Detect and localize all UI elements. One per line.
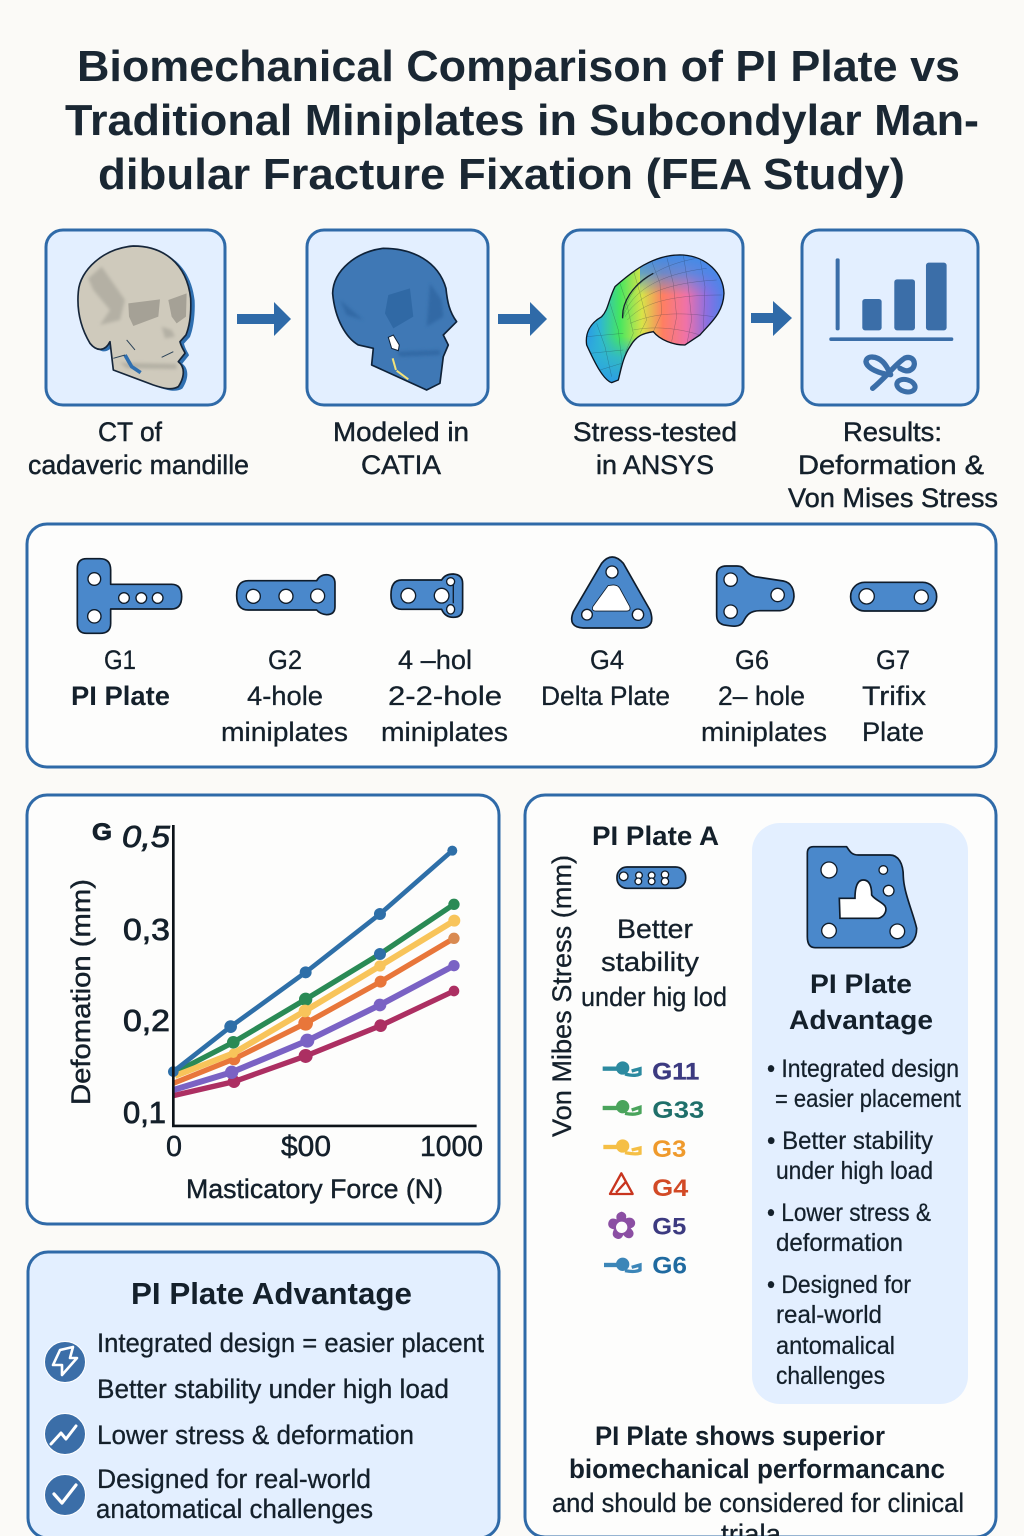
list items: Better stability under high load xyxy=(97,1374,449,1404)
icon: modeled blue skull xyxy=(333,248,457,390)
bullet: designed for real world: antomalical xyxy=(776,1332,895,1360)
icon: small plate xyxy=(617,867,686,888)
label: G3: miniplates xyxy=(381,717,508,747)
series: green xyxy=(173,899,460,1073)
heading: Advantage xyxy=(789,1005,933,1035)
icon: G1 PI plate xyxy=(77,559,182,633)
y axis labels xyxy=(92,819,171,1130)
icon: FEA stress mesh xyxy=(583,253,727,383)
x axis labels: $00 xyxy=(281,1131,331,1163)
label: G6: G6 xyxy=(735,645,769,675)
panel: workflow step 3 ANSYS xyxy=(563,230,743,405)
caption: step 1: CT of xyxy=(98,417,162,447)
bullet: better stability xyxy=(767,1127,933,1185)
bullet: integrated design xyxy=(767,1055,961,1113)
label: G2: G2 xyxy=(268,645,302,675)
conclusion: biomechanical performancanc xyxy=(569,1454,945,1484)
series: blue xyxy=(168,846,457,1077)
text: better stability xyxy=(581,914,727,1012)
y axis labels: G xyxy=(92,819,112,846)
legend row G33: G33 xyxy=(652,1097,704,1124)
panel: plate types xyxy=(27,524,996,767)
icon: check xyxy=(44,1474,86,1516)
arrow: step 2 to 3 xyxy=(498,302,547,336)
label: G7: G7 xyxy=(876,645,910,675)
label: G7: Plate xyxy=(862,717,924,747)
panel: inner PI plate advantage xyxy=(752,823,968,1404)
bullet: better stability: • Better stability xyxy=(767,1127,933,1155)
title: Biomechanical Comparison of PI Plate vs xyxy=(77,42,960,91)
caption: step 1: cadaveric mandille xyxy=(28,450,249,480)
panel: workflow step 4 results xyxy=(802,230,978,405)
bullet: lower stress: • Lower stress & xyxy=(767,1199,931,1227)
legend row G11 xyxy=(603,1058,699,1085)
label: G2 xyxy=(221,645,348,747)
label: G7: Trifix xyxy=(862,681,927,711)
panel: deformation chart xyxy=(27,795,499,1224)
line chart xyxy=(168,825,477,1126)
icon: G4 delta plate xyxy=(572,557,652,628)
caption: step 4: Results: xyxy=(843,417,942,447)
label: G2: miniplates xyxy=(221,717,348,747)
conclusion xyxy=(552,1421,964,1536)
legend row G11: G11 xyxy=(652,1058,699,1085)
caption: step 4: Deformation & xyxy=(798,450,984,480)
list items: anatomatical challenges xyxy=(96,1494,373,1524)
legend row G4: G4 xyxy=(652,1175,689,1202)
caption: step 1 xyxy=(28,417,249,480)
label: G4 xyxy=(541,645,670,711)
series: orange xyxy=(173,933,460,1083)
y axis labels: 0,2 xyxy=(123,1003,170,1038)
series: yellow xyxy=(175,915,460,1076)
y axis title: Defomation (mm) xyxy=(66,879,96,1105)
legend row G5 xyxy=(608,1212,686,1240)
caption: step 4: Von Mises Stress xyxy=(788,483,998,513)
list items: Lower stress & deformation xyxy=(97,1420,414,1450)
icon: G2 4-hole miniplate xyxy=(237,575,335,615)
list items xyxy=(96,1328,484,1524)
bullet: better stability: under high load xyxy=(776,1157,933,1185)
label: G3: 2-2-hole xyxy=(388,681,502,711)
legend row G33 xyxy=(603,1097,704,1124)
heading: PI Plate Advantage xyxy=(131,1276,412,1311)
label: G4: Delta Plate xyxy=(541,681,670,711)
title: Traditional Miniplates in Subcondylar Man- xyxy=(65,96,979,145)
icon: CT skull xyxy=(78,246,195,391)
x axis labels: 1000 xyxy=(420,1131,483,1163)
caption: step 2: Modeled in xyxy=(333,417,469,447)
bullet: designed for real world xyxy=(767,1271,911,1390)
label: G1: G1 xyxy=(104,645,136,675)
label: G6: miniplates xyxy=(701,717,827,747)
legend xyxy=(603,1058,704,1279)
label: G6: 2– hole xyxy=(718,681,805,711)
bullet: integrated design: • Integrated design xyxy=(767,1055,959,1083)
caption: step 3: Stress-tested xyxy=(573,417,737,447)
legend row G5: G5 xyxy=(652,1213,686,1240)
x axis labels xyxy=(166,1131,483,1163)
series: crimson xyxy=(173,986,459,1096)
arrow: step 3 to 4 xyxy=(751,301,792,336)
legend row G3: G3 xyxy=(652,1136,686,1163)
icon: G6 2-hole miniplate xyxy=(717,566,794,626)
caption: step 2 xyxy=(333,417,469,480)
text: better stability: Better xyxy=(617,914,693,944)
conclusion: PI Plate shows superior xyxy=(595,1421,885,1451)
label: G1 xyxy=(71,645,170,711)
legend row G6: G6 xyxy=(652,1252,687,1279)
text: better stability: under hig lod xyxy=(581,982,727,1012)
bullet: designed for real world: challenges xyxy=(776,1362,885,1390)
heading: PI Plate xyxy=(810,969,912,999)
label: G3 xyxy=(381,645,508,747)
label: G6 xyxy=(701,645,827,747)
bullet: designed for real world: • Designed for xyxy=(767,1271,911,1299)
label: G3: 4 –hol xyxy=(398,645,472,675)
caption: step 3: in ANSYS xyxy=(596,450,714,480)
bullet: lower stress xyxy=(767,1199,931,1257)
panel: workflow step 1 CT xyxy=(46,230,225,405)
bullet: integrated design: = easier placement xyxy=(775,1085,961,1113)
heading xyxy=(789,969,933,1035)
legend row G4 xyxy=(610,1173,689,1202)
y axis title: Von Mibes Stress (mm) xyxy=(547,855,577,1137)
bullet: lower stress: deformation xyxy=(776,1229,903,1257)
title: dibular Fracture Fixation (FEA Study) xyxy=(98,150,905,199)
x axis labels: 0 xyxy=(166,1131,182,1163)
legend row G6 xyxy=(604,1252,687,1279)
icon: G3 2-2-hole miniplate xyxy=(391,574,463,617)
arrow: step 1 to 2 xyxy=(237,302,291,336)
icon: G7 trifix plate xyxy=(851,582,937,611)
title xyxy=(65,42,979,199)
y axis labels: 0,3 xyxy=(123,912,170,947)
legend row G3 xyxy=(603,1136,686,1163)
x axis title: Masticatory Force (N) xyxy=(186,1174,443,1204)
icon: trend line xyxy=(44,1414,86,1454)
caption: step 3 xyxy=(573,417,737,480)
text: better stability: stability xyxy=(601,947,700,977)
conclusion: and should be considered for clinical xyxy=(552,1488,964,1518)
axes xyxy=(173,825,477,1126)
series: purple xyxy=(173,960,460,1090)
bullet: designed for real world: real-world xyxy=(776,1301,882,1329)
list items: Designed for real-world xyxy=(97,1464,371,1494)
label: G4: G4 xyxy=(590,645,624,675)
y axis labels: 0,5 xyxy=(122,819,171,854)
list items: Integrated design = easier placent xyxy=(97,1328,484,1358)
label: G7 xyxy=(862,645,927,747)
panel: PI plate advantage list xyxy=(28,1252,499,1536)
label: G2: 4-hole xyxy=(247,681,323,711)
icon: results bar chart and percent xyxy=(829,258,953,394)
caption: step 4 xyxy=(788,417,998,513)
y axis labels: 0,1 xyxy=(123,1095,166,1130)
heading: PI Plate A: PI Plate A xyxy=(592,821,719,851)
icon: PI plate xyxy=(807,847,917,948)
label: G1: PI Plate xyxy=(71,681,170,711)
panel: von Mises stress and conclusion xyxy=(525,795,996,1536)
caption: step 2: CATIA xyxy=(361,450,441,480)
panel: workflow step 2 CATIA xyxy=(307,230,488,405)
icon: bolt xyxy=(44,1342,86,1382)
